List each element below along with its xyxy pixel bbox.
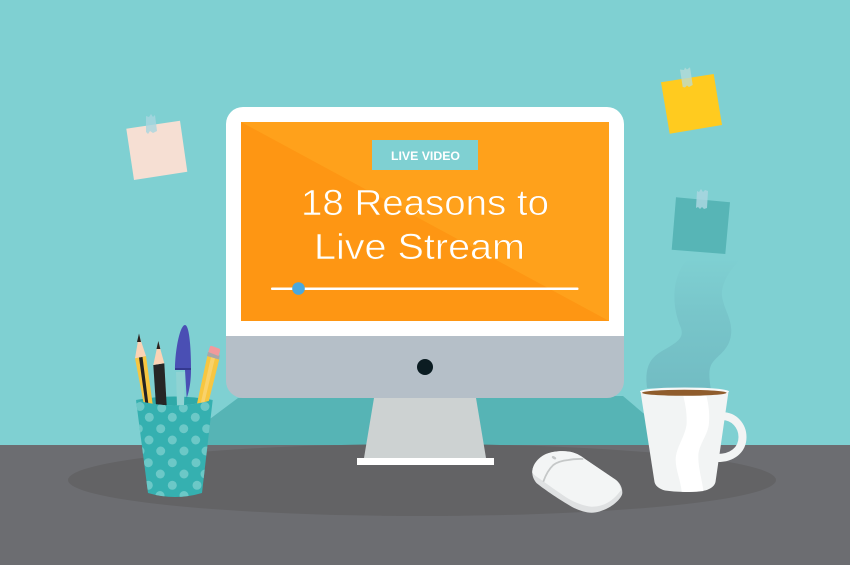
steam — [646, 258, 740, 390]
mug body — [640, 392, 728, 492]
title: 18 Reasons to — [301, 182, 549, 223]
sticky note: yellow — [661, 67, 722, 134]
coffee mug — [640, 388, 742, 492]
mug handle — [716, 416, 742, 458]
coffee — [640, 388, 729, 396]
screen — [241, 122, 609, 321]
pencil: black — [153, 341, 167, 406]
sticky note: pink — [126, 114, 187, 180]
badge: live video — [372, 140, 478, 170]
pencil cup — [134, 325, 220, 500]
title: Live Stream — [314, 226, 525, 267]
title — [301, 182, 549, 267]
camera dot — [417, 359, 433, 375]
monitor stand — [364, 398, 486, 458]
pencil: yellow with eraser — [197, 346, 220, 405]
monitor bezel — [226, 107, 624, 336]
video progress bar — [271, 282, 578, 295]
cup inner rim — [136, 396, 213, 406]
mouse base — [532, 451, 622, 513]
cup body — [136, 400, 213, 497]
mouse scroll wheel — [551, 455, 557, 460]
monitor base — [357, 458, 494, 465]
mouse top — [532, 451, 621, 507]
monitor chin — [226, 330, 624, 398]
badge: live video: LIVE VIDEO — [391, 149, 460, 163]
pencil: yellow striped — [135, 334, 153, 405]
computer mouse — [532, 451, 622, 513]
polka dots — [134, 402, 211, 500]
desk — [0, 444, 850, 565]
pen: blue — [175, 325, 191, 406]
mouse button groove — [543, 459, 583, 482]
monitor shadow — [175, 396, 700, 445]
sticky note: teal — [672, 189, 730, 254]
monitor — [226, 107, 624, 465]
mug highlight — [676, 396, 709, 492]
